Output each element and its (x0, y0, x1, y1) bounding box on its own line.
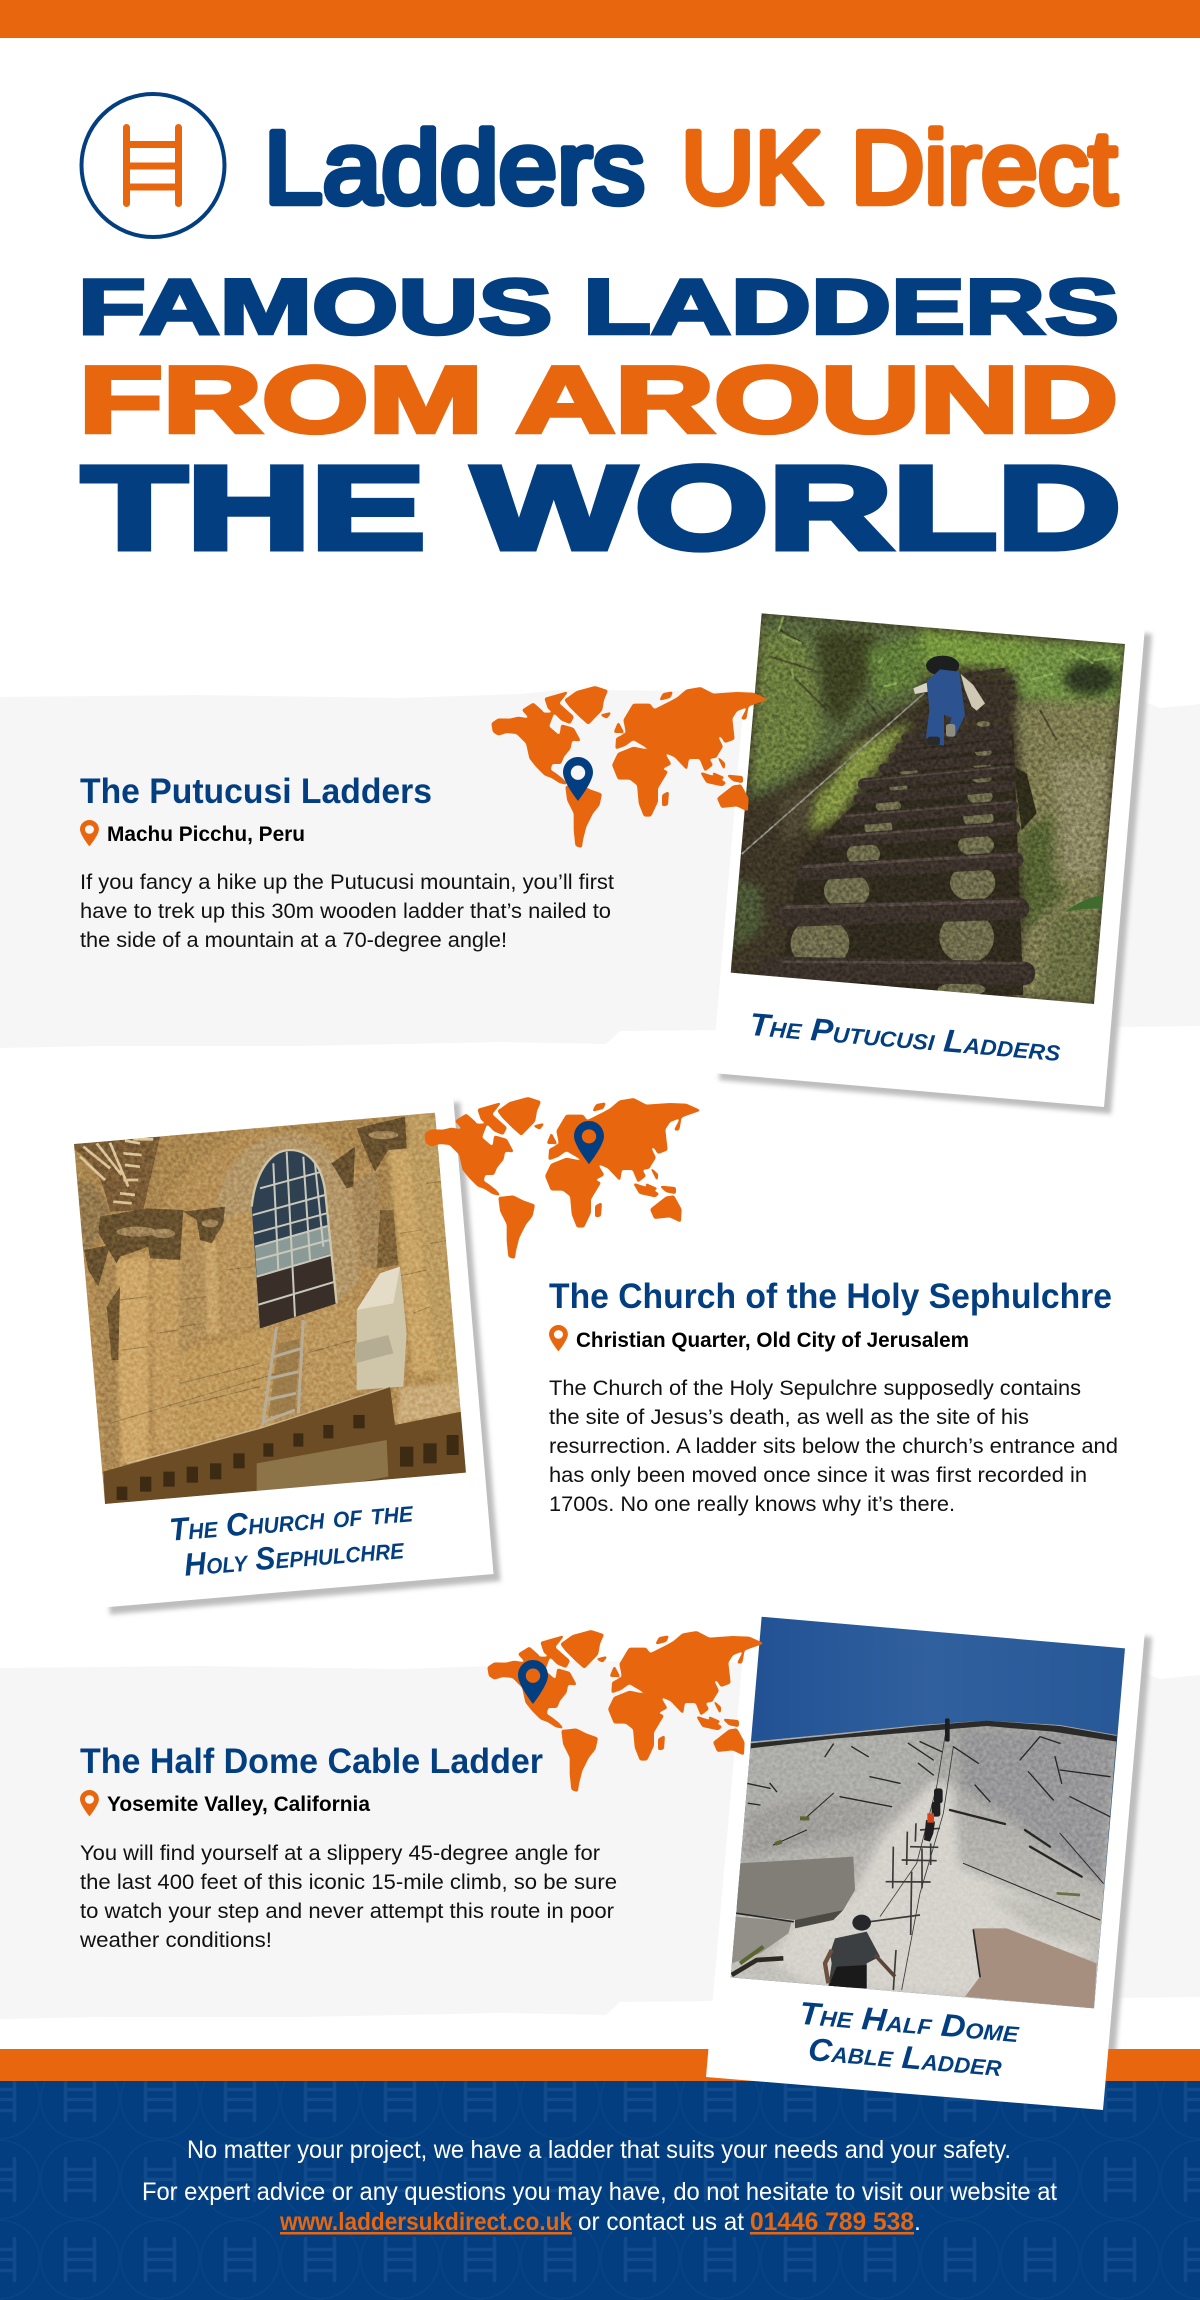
location: Christian Quarter, Old City of Jerusalem (576, 1329, 969, 1352)
logo (82, 94, 1117, 237)
footer blue panel with ladder pattern (0, 2081, 1200, 2300)
footer text: . (914, 2208, 921, 2236)
logo icon: ladder in circle (82, 94, 224, 237)
body text: have to trek up this 30m wooden ladder that’s nailed to (80, 900, 611, 923)
ladder on ledge (263, 1320, 303, 1425)
caption: The Church of the Holy Sephulchre: Holy Sephulchre (183, 1529, 406, 1583)
icon: map pin California (518, 1660, 548, 1704)
section text: Half Dome: The Half Dome Cable Ladder (80, 1742, 543, 1781)
body text (79, 1842, 617, 1952)
footer text: For expert advice or any questions you may have, do not hesitate to visit our website at (142, 2178, 1057, 2206)
body text: has only been moved once since it was first recorded in (549, 1464, 1087, 1487)
body text: to watch your step and never attempt this route in poor (80, 1900, 614, 1923)
footer text: www.laddersukdirect.co.uk (279, 2208, 572, 2236)
section text: Putucusi (80, 772, 614, 952)
caption: The Church of the Holy Sephulchre: The Church of the (168, 1492, 415, 1548)
texture (74, 1112, 460, 1495)
photo: church facade with ladder (74, 1112, 466, 1504)
title: THE WORLD (82, 442, 1121, 574)
body text: 1700s. No one really knows why it’s there. (549, 1493, 955, 1516)
footer text: or contact us at (578, 2208, 744, 2236)
body text: resurrection. A ladder sits below the church’s entrance and (549, 1435, 1118, 1458)
world map 2 with Jerusalem pin (425, 1098, 700, 1258)
cable ladder (870, 1727, 953, 1990)
logo wordmark: Ladders (264, 110, 645, 225)
photo: Half Dome cables (730, 1616, 1125, 2008)
body text: If you fancy a hike up the Putucusi mountain, you’ll first (80, 871, 614, 894)
title (78, 264, 1121, 574)
polaroid 1: Putucusi Ladders (712, 593, 1152, 1114)
location: Yosemite Valley, California (107, 1793, 370, 1816)
caption: The Half Dome Cable Ladder (798, 1995, 1022, 2083)
photo: wooden ladder on the mountain (730, 613, 1125, 1004)
grey band: section 3 (0, 1661, 1200, 2019)
section text: Putucusi: The Putucusi Ladders (80, 772, 432, 811)
footer orange band (0, 2049, 1200, 2081)
hiker (825, 1915, 895, 1988)
logo wordmark (264, 110, 1117, 225)
body text: the site of Jesus’s death, as well as the site of his (549, 1406, 1029, 1429)
section text: Church (549, 1277, 1118, 1516)
body text: the last 400 feet of this iconic 15-mile climb, so be sure (80, 1871, 617, 1894)
body text (80, 871, 614, 952)
icon: location pin (80, 820, 99, 846)
caption: The Putucusi Ladders: The Putucusi Ladders (748, 1006, 1062, 1068)
body text: the side of a mountain at a 70-degree angle! (80, 929, 507, 952)
title: FAMOUS LADDERS (78, 264, 1119, 350)
polaroid 2: Church of the Holy Sepulchre (60, 1095, 500, 1614)
footer text (142, 2136, 1057, 2236)
icon: map pin Peru (563, 757, 593, 801)
world map 3 with California pin (488, 1631, 763, 1791)
body text: weather conditions! (79, 1929, 272, 1952)
caption: The Half Dome Cable Ladder: Cable Ladder (807, 2031, 1003, 2083)
footer text: No matter your project, we have a ladder that suits your needs and your safety. (187, 2136, 1011, 2164)
logo wordmark: UK Direct (681, 110, 1117, 225)
grey band: section 1 (0, 690, 1200, 1048)
icon: map pin Jerusalem (574, 1121, 604, 1164)
caption: The Church of the Holy Sephulchre (168, 1492, 415, 1583)
climber (913, 656, 985, 746)
caption: The Half Dome Cable Ladder: The Half Dome (798, 1995, 1022, 2049)
cornice (103, 1387, 466, 1504)
window (252, 1151, 336, 1328)
footer text: 01446 789 538 (750, 2208, 914, 2236)
body text (549, 1377, 1118, 1516)
body text: You will find yourself at a slippery 45-degree angle for (80, 1842, 600, 1865)
body text: The Church of the Holy Sepulchre supposedly contains (549, 1377, 1081, 1400)
section text: Half Dome (79, 1742, 617, 1952)
polaroid 3: Half Dome (706, 1597, 1152, 2117)
white stone block (357, 1267, 407, 1390)
icon: location pin (80, 1790, 99, 1816)
section text: Church: The Church of the Holy Sephulchre (549, 1277, 1112, 1316)
title: FROM AROUND (79, 347, 1118, 452)
world map 1 with Peru pin (492, 687, 767, 847)
location: Machu Picchu, Peru (107, 823, 305, 846)
texture (731, 614, 1125, 1004)
icon: location pin (549, 1325, 568, 1351)
top orange bar (0, 0, 1200, 38)
